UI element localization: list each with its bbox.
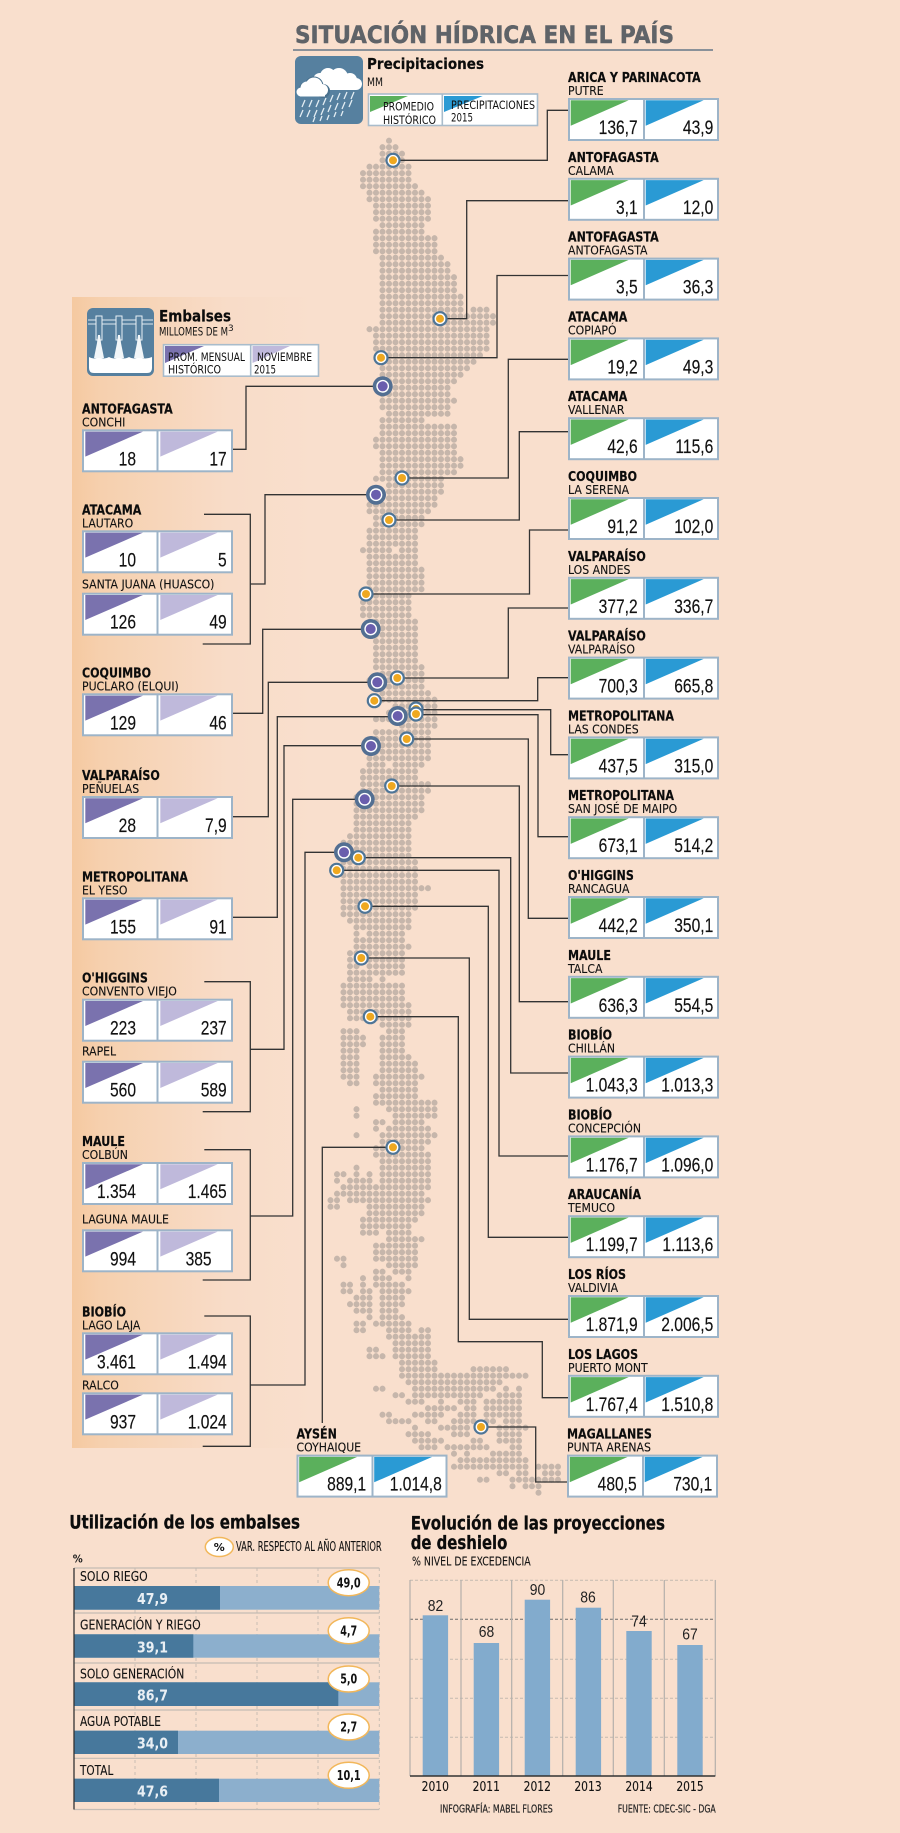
bar chart: snowmelt projections: 74: [631, 1614, 647, 1631]
legend: variation ellipse: [205, 1538, 382, 1556]
card: Rapel: RAPEL: [82, 1044, 117, 1059]
card: Antofagasta, Antofagasta: ANTOFAGASTA: [568, 230, 659, 245]
bar chart: snowmelt projections: 90: [530, 1582, 545, 1599]
card: Los Lagos, Puerto Montt: 1.767,4: [586, 1393, 638, 1415]
heading: utilización de los embalses: Utilización de los embalses: [69, 1511, 300, 1533]
card: Valparaíso, Los Andes: LOS ANDES: [568, 562, 630, 577]
bar chart: reservoir utilisation: [74, 1568, 379, 1810]
card: Atacama, Copiapó: 19,2: [607, 356, 638, 378]
card: Aysén, Coyhaique: 1.014,8: [390, 1473, 442, 1495]
card: Magallanes, Punta Arenas: 730,1: [673, 1473, 712, 1495]
connector lines: reservoirs: [203, 386, 398, 1446]
icon: rain cloud: [295, 56, 363, 124]
card: Valparaíso, Valparaíso: 700,3: [599, 675, 638, 697]
card: Los Lagos, Puerto Montt: PUERTO MONT: [568, 1360, 648, 1375]
card: Aysén, Coyhaique: COYHAIQUE: [296, 1440, 361, 1455]
card: Metropolitana, El Yeso: [82, 869, 232, 939]
card: Coquimbo, Puclaro: PUCLARO (ELQUI): [82, 679, 179, 693]
bar chart: snowmelt projections: 2010: [422, 1779, 449, 1795]
card: Atacama, Vallenar: 42,6: [607, 436, 638, 458]
bar chart: reservoir utilisation: 5,0: [340, 1673, 357, 1688]
legend: reservoirs: 2015: [254, 363, 276, 377]
card: Atacama, Copiapó: COPIAPÓ: [568, 322, 617, 338]
card: Maule, Talca: [567, 948, 718, 1018]
card: Maule, Talca: 636,3: [599, 994, 638, 1016]
credit: fuente: FUENTE: CDEC-SIC - DGA: [618, 1803, 716, 1816]
card: Arica y Parinacota, Putre: [568, 70, 718, 140]
card: Santa Juana (Huasco): 126: [110, 611, 136, 633]
bar chart: reservoir utilisation: 2,7: [340, 1721, 357, 1736]
map markers: reservoirs: [334, 376, 408, 862]
card: Rapel: [82, 1044, 232, 1103]
panel: embalses background: [72, 297, 312, 1448]
card: Atacama, Vallenar: ATACAMA: [568, 389, 628, 404]
card: Biobío, Lago Laja: [82, 1303, 232, 1374]
card: Biobío, Lago Laja: 3.461: [97, 1351, 136, 1373]
card: Biobío, Chillán: 1.043,3: [586, 1074, 638, 1096]
card: Los Ríos, Valdivia: LOS RÍOS: [568, 1266, 626, 1282]
card: Antofagasta, Antofagasta: [568, 230, 718, 300]
card: Biobío, Concepción: [568, 1106, 718, 1177]
heading: precipitaciones: Precipitaciones: [367, 55, 484, 73]
bar chart: reservoir utilisation: AGUA POTABLE: [80, 1715, 161, 1730]
card: O'Higgins, Convento Viejo: O'HIGGINS: [82, 971, 148, 986]
card: Metropolitana, Las Condes: [568, 709, 718, 778]
card: O'Higgins, Convento Viejo: 237: [201, 1017, 227, 1039]
bar chart: reservoir utilisation: 49,0: [337, 1576, 361, 1591]
card: Laguna Maule: 994: [110, 1248, 136, 1270]
connector lines: precipitation stations: [322, 110, 568, 1482]
card: Maule, Talca: MAULE: [568, 948, 611, 963]
bar chart: reservoir utilisation: SOLO GENERACIÓN: [80, 1666, 184, 1682]
card: Magallanes, Punta Arenas: PUNTA ARENAS: [567, 1440, 651, 1455]
bar chart: snowmelt projections: 82: [428, 1598, 443, 1615]
card: Santa Juana (Huasco): [82, 577, 232, 635]
bar chart: reservoir utilisation: 10,1: [337, 1769, 361, 1784]
card: Biobío, Chillán: CHILLÁN: [568, 1040, 615, 1056]
bar chart: reservoir utilisation: 39,1: [137, 1638, 168, 1656]
card: Antofagasta, Calama: [568, 150, 718, 220]
legend: precipitation: [368, 94, 538, 127]
card: Maule, Colbún: 1.465: [188, 1180, 227, 1202]
bar chart: reservoir utilisation: 47,9: [137, 1590, 168, 1608]
heading: embalses: [159, 307, 234, 339]
card: Coquimbo, La Serena: [568, 469, 718, 539]
card: Biobío, Concepción: 1.096,0: [661, 1154, 713, 1176]
card: O'Higgins, Convento Viejo: 223: [110, 1017, 136, 1039]
card: Aysén, Coyhaique: AYSÉN: [296, 1426, 337, 1442]
card: Valparaíso, Los Andes: 377,2: [599, 595, 638, 617]
card: Arica y Parinacota, Putre: 136,7: [599, 116, 638, 138]
card: O'Higgins, Rancagua: O'HIGGINS: [568, 868, 634, 883]
card: Metropolitana, San José de Maipo: SAN JOSÉ DE MAIPO: [568, 800, 677, 816]
card: Metropolitana, San José de Maipo: [568, 788, 718, 858]
card: Ralco: 1.024: [188, 1411, 227, 1433]
card: Valparaíso, Peñuelas: [82, 767, 232, 838]
card: Biobío, Lago Laja: 1.494: [188, 1351, 227, 1373]
card: Coquimbo, Puclaro: [82, 665, 232, 735]
card: O'Higgins, Rancagua: RANCAGUA: [568, 881, 630, 896]
card: Laguna Maule: LAGUNA MAULE: [82, 1212, 169, 1226]
card: Los Ríos, Valdivia: VALDIVIA: [568, 1280, 618, 1295]
card: Biobío, Concepción: BIOBÍO: [568, 1106, 612, 1123]
legend: precipitation: HISTÓRICO: [383, 112, 436, 127]
heading: evolución de las proyecciones de deshielo: Evolución de las proyecciones: [411, 1512, 665, 1534]
card: Antofagasta, Calama: 3,1: [616, 196, 638, 218]
icon: dam: [87, 308, 154, 376]
card: Coquimbo, La Serena: 102,0: [674, 515, 713, 537]
card: O'Higgins, Rancagua: 442,2: [599, 914, 638, 936]
legend: precipitation: 2015: [451, 111, 473, 125]
legend: variation ellipse: %: [214, 1541, 225, 1554]
card: Valparaíso, Peñuelas: 7,9: [205, 814, 227, 836]
card: Biobío, Lago Laja: LAGO LAJA: [82, 1318, 140, 1332]
bar chart: snowmelt projections: 2014: [625, 1779, 653, 1795]
heading: evolución de las proyecciones de deshielo: [411, 1512, 665, 1554]
card: Metropolitana, Las Condes: METROPOLITANA: [568, 709, 675, 724]
card: Atacama, Lautaro: LAUTARO: [82, 516, 133, 530]
subtitle: nivel de excedencia: % NIVEL DE EXCEDENCIA: [412, 1555, 531, 1569]
card: Biobío, Concepción: 1.176,7: [586, 1154, 638, 1176]
card: Antofagasta, Antofagasta: 3,5: [616, 276, 638, 298]
legend: precipitation: PROMEDIO: [383, 100, 434, 114]
bar chart: snowmelt projections: 2012: [524, 1779, 551, 1795]
card: Biobío, Chillán: [568, 1027, 718, 1098]
card: Antofagasta, Conchi: 18: [119, 448, 136, 470]
card: Antofagasta, Conchi: 17: [209, 448, 227, 470]
card: Atacama, Vallenar: 115,6: [675, 436, 713, 458]
card: Valparaíso, Valparaíso: VALPARAÍSO: [568, 628, 646, 644]
bar chart: snowmelt projections: 2013: [574, 1779, 602, 1795]
card: Arica y Parinacota, Putre: PUTRE: [568, 83, 604, 98]
card: Santa Juana (Huasco): SANTA JUANA (HUASCO): [82, 577, 214, 592]
card: Metropolitana, El Yeso: 155: [110, 916, 136, 938]
card: Araucanía, Temuco: [567, 1186, 718, 1257]
heading: embalses: 3: [228, 324, 234, 334]
card: Santa Juana (Huasco): 49: [209, 611, 227, 633]
card: O'Higgins, Rancagua: [568, 868, 718, 938]
card: Los Lagos, Puerto Montt: [568, 1347, 718, 1417]
bar chart: reservoir utilisation: 47,6: [137, 1782, 168, 1800]
bar chart: snowmelt projections: 2015: [676, 1779, 704, 1795]
card: Atacama, Copiapó: ATACAMA: [568, 310, 628, 325]
card: Los Ríos, Valdivia: 1.871,9: [586, 1313, 638, 1335]
card: Antofagasta, Antofagasta: ANTOFAGASTA: [568, 243, 647, 258]
bar chart: snowmelt projections: 2011: [473, 1779, 500, 1795]
card: Metropolitana, Las Condes: LAS CONDES: [568, 722, 639, 737]
heading: embalses: MILLOMES DE M: [159, 325, 228, 339]
bar chart: snowmelt projections: 68: [479, 1624, 494, 1641]
bar chart: reservoir utilisation: 86,7: [137, 1686, 168, 1704]
card: Valparaíso, Los Andes: [568, 548, 718, 619]
card: Antofagasta, Antofagasta: 36,3: [683, 276, 713, 298]
card: O'Higgins, Convento Viejo: CONVENTO VIEJO: [82, 984, 177, 999]
card: Coquimbo, Puclaro: 129: [110, 712, 136, 734]
card: Valparaíso, Los Andes: VALPARAÍSO: [568, 548, 646, 564]
card: Antofagasta, Conchi: CONCHI: [82, 415, 125, 429]
card: Maule, Talca: 554,5: [674, 994, 713, 1016]
unit label: %: [73, 1553, 83, 1566]
card: Antofagasta, Calama: 12,0: [683, 196, 713, 218]
card: O'Higgins, Rancagua: 350,1: [674, 914, 713, 936]
card: Valparaíso, Peñuelas: PEÑUELAS: [82, 780, 139, 796]
card: Los Lagos, Puerto Montt: 1.510,8: [661, 1393, 713, 1415]
card: Metropolitana, El Yeso: EL YESO: [82, 883, 127, 897]
card: Los Ríos, Valdivia: 2.006,5: [661, 1313, 713, 1335]
heading: precipitaciones: [367, 55, 484, 89]
bar chart: snowmelt projections: 67: [682, 1626, 698, 1643]
card: Biobío, Lago Laja: BIOBÍO: [82, 1303, 126, 1320]
card: Valparaíso, Valparaíso: VALPARAÍSO: [568, 641, 635, 657]
card: Antofagasta, Calama: CALAMA: [568, 163, 614, 178]
heading: embalses: Embalses: [159, 307, 231, 326]
legend: reservoirs: [164, 345, 318, 377]
card: Arica y Parinacota, Putre: 43,9: [683, 116, 713, 138]
card: Aysén, Coyhaique: 889,1: [327, 1473, 366, 1495]
bar chart: reservoir utilisation: 34,0: [137, 1735, 168, 1753]
card: Metropolitana, San José de Maipo: METROPOLITANA: [568, 788, 675, 803]
card: Arica y Parinacota, Putre: ARICA Y PARINACOTA: [568, 70, 701, 85]
card: Araucanía, Temuco: ARAUCANÍA: [568, 1186, 642, 1202]
map markers: precipitation stations: [329, 153, 489, 1435]
card: Valparaíso, Peñuelas: 28: [119, 814, 136, 836]
card: Biobío, Chillán: 1.013,3: [661, 1074, 713, 1096]
card: Metropolitana, San José de Maipo: 514,2: [674, 835, 713, 857]
card: Maule, Talca: TALCA: [567, 961, 602, 976]
card: Metropolitana, Las Condes: 315,0: [674, 755, 713, 777]
card: Valparaíso, Los Andes: 336,7: [674, 595, 713, 617]
card: Biobío, Chillán: BIOBÍO: [568, 1027, 612, 1043]
card: Maule, Colbún: [82, 1134, 232, 1204]
map of Chile made of dots: [330, 141, 558, 1493]
card: Los Lagos, Puerto Montt: LOS LAGOS: [568, 1347, 638, 1362]
bar chart: reservoir utilisation: TOTAL: [79, 1764, 114, 1779]
bar chart: snowmelt projections: 86: [580, 1590, 596, 1607]
legend: reservoirs: PROM. MENSUAL: [168, 350, 245, 364]
card: Magallanes, Punta Arenas: MAGALLANES: [567, 1427, 652, 1442]
card: Atacama, Copiapó: 49,3: [683, 356, 713, 378]
card: Ralco: 937: [110, 1411, 136, 1433]
card: Maule, Colbún: MAULE: [82, 1134, 125, 1149]
card: Atacama, Vallenar: [568, 389, 718, 459]
bar chart: reservoir utilisation: 4,7: [340, 1624, 357, 1639]
card: Laguna Maule: [82, 1212, 232, 1271]
card: Araucanía, Temuco: 1.199,7: [586, 1234, 638, 1256]
heading: precipitaciones: MM: [367, 75, 383, 89]
card: Araucanía, Temuco: TEMUCO: [567, 1200, 615, 1215]
bar chart: snowmelt projections: [410, 1580, 715, 1795]
card: Atacama, Vallenar: VALLENAR: [568, 402, 624, 417]
card: Atacama, Copiapó: [568, 310, 718, 379]
card: Biobío, Concepción: CONCEPCIÓN: [568, 1120, 641, 1136]
card: Maule, Colbún: COLBÚN: [82, 1146, 128, 1162]
card: Metropolitana, El Yeso: 91: [209, 916, 227, 938]
bar chart: reservoir utilisation: SOLO RIEGO: [80, 1570, 148, 1585]
card: Rapel: 560: [110, 1079, 136, 1101]
card: Coquimbo, Puclaro: 46: [209, 712, 227, 734]
heading: evolución de las proyecciones de deshielo: de deshielo: [411, 1532, 507, 1554]
card: Aysén, Coyhaique: [296, 1426, 446, 1497]
credit: infografía: INFOGRAFÍA: MABEL FLORES: [440, 1803, 553, 1816]
card: Atacama, Lautaro: 5: [218, 549, 227, 571]
card: O'Higgins, Convento Viejo: [82, 971, 232, 1041]
card: Ralco: RALCO: [82, 1378, 119, 1392]
bar chart: reservoir utilisation: GENERACIÓN Y RIEGO: [80, 1617, 201, 1633]
card: Coquimbo, Puclaro: COQUIMBO: [82, 665, 151, 681]
card: Valparaíso, Valparaíso: [568, 628, 718, 699]
card: Antofagasta, Conchi: [82, 401, 232, 471]
card: Atacama, Lautaro: ATACAMA: [82, 502, 142, 518]
card: Rapel: 589: [201, 1079, 227, 1101]
card: Maule, Colbún: 1.354: [97, 1180, 136, 1202]
legend: precipitation: PRECIPITACIONES: [451, 98, 535, 112]
card: Valparaíso, Peñuelas: VALPARAÍSO: [82, 767, 160, 783]
card: Antofagasta, Calama: ANTOFAGASTA: [568, 150, 659, 165]
card: Atacama, Lautaro: [82, 502, 232, 572]
card: Laguna Maule: 385: [186, 1248, 212, 1270]
card: Magallanes, Punta Arenas: [567, 1427, 717, 1497]
card: Ralco: [82, 1378, 232, 1434]
card: Metropolitana, Las Condes: 437,5: [599, 755, 638, 777]
card: Coquimbo, La Serena: COQUIMBO: [568, 469, 637, 484]
card: Metropolitana, El Yeso: METROPOLITANA: [82, 869, 189, 885]
legend: reservoirs: NOVIEMBRE: [257, 350, 312, 364]
card: Magallanes, Punta Arenas: 480,5: [598, 1473, 637, 1495]
card: Atacama, Lautaro: 10: [119, 549, 136, 571]
card: Araucanía, Temuco: 1.113,6: [662, 1234, 713, 1256]
card: Los Ríos, Valdivia: [568, 1266, 718, 1337]
card: Valparaíso, Valparaíso: 665,8: [674, 675, 713, 697]
legend: reservoirs: HISTÓRICO: [168, 362, 221, 377]
card: Coquimbo, La Serena: 91,2: [607, 515, 638, 537]
legend: variation ellipse: VAR. RESPECTO AL AÑO ANTERIOR: [236, 1539, 382, 1555]
card: Antofagasta, Conchi: ANTOFAGASTA: [82, 401, 173, 417]
card: Metropolitana, San José de Maipo: 673,1: [599, 835, 638, 857]
card: Coquimbo, La Serena: LA SERENA: [568, 482, 629, 497]
title: SITUACIÓN HÍDRICA EN EL PAÍS: [295, 19, 674, 49]
